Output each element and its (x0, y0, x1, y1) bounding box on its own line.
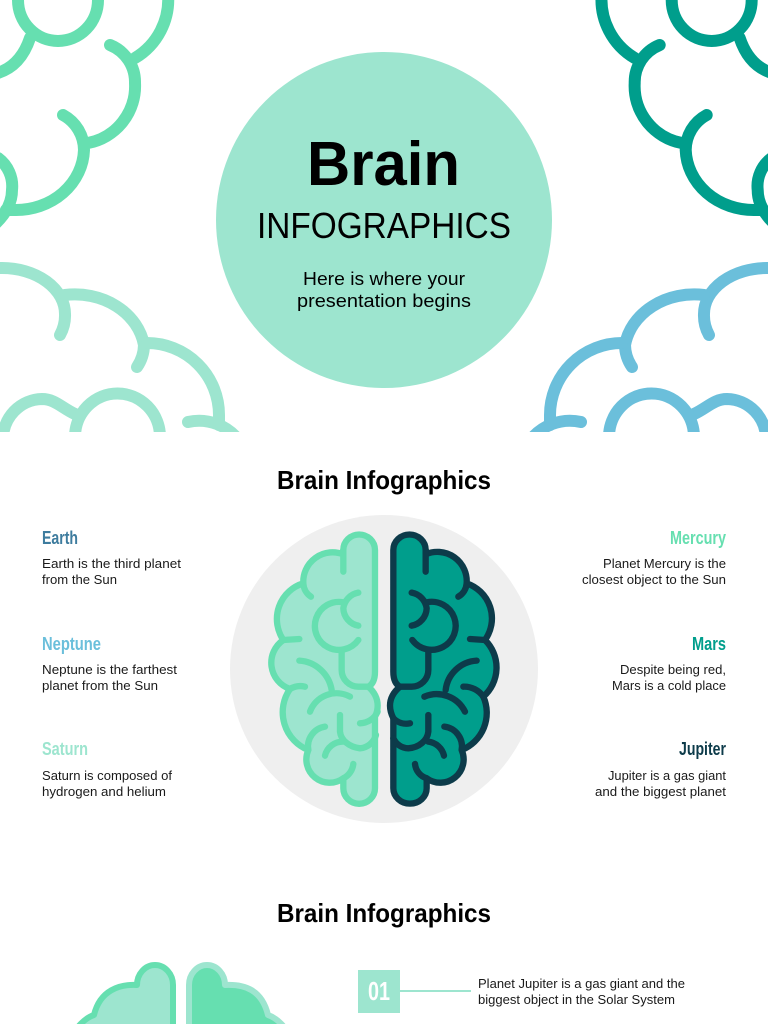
item: Mercury: closest object to the Sun (582, 572, 726, 587)
item: Mercury: Mercury (670, 528, 726, 548)
step 01 number box (358, 970, 400, 1013)
icon: bottom brain right half (189, 965, 292, 1024)
intro text: presentation begins (297, 291, 471, 311)
title circle (216, 52, 552, 388)
item: Neptune: planet from the Sun (42, 678, 158, 693)
item: Neptune: Neptune is the farthest (42, 662, 177, 677)
decoration: top-right teal brain outline (601, 0, 768, 225)
item: Earth: Earth is the third planet (42, 556, 181, 571)
step 01 text (478, 976, 685, 1007)
intro text: Here is where your (303, 269, 465, 289)
item: Saturn: Saturn (42, 739, 88, 759)
item: Mars: Despite being red, (620, 662, 726, 677)
item: Saturn: hydrogen and helium (42, 784, 166, 799)
item: Saturn (42, 739, 172, 799)
heading: section 1: Brain Infographics (277, 465, 491, 495)
item: Earth (42, 528, 181, 587)
icon: bottom brain left half (70, 965, 173, 1024)
decoration: top-left green brain outline (0, 0, 168, 225)
item: Earth: from the Sun (42, 572, 117, 587)
step 01 number box: 01 (368, 976, 390, 1006)
decoration: bottom-right blue brain outline (529, 268, 768, 442)
decoration: bottom-left mint brain outline (0, 268, 240, 442)
item: Jupiter: and the biggest planet (595, 784, 726, 799)
subtitle: INFOGRAPHICS (257, 205, 511, 246)
item: Mars: Mars is a cold place (612, 678, 726, 693)
title: Brain (307, 130, 460, 199)
item: Jupiter: Jupiter (679, 739, 726, 759)
icon: brain right half (390, 535, 497, 804)
item: Mars: Mars (692, 634, 726, 654)
item: Neptune (42, 634, 177, 693)
item: Mercury (582, 528, 726, 587)
item: Mars (612, 634, 726, 693)
step 01 text: Planet Jupiter is a gas giant and the (478, 976, 685, 991)
step 01 text: biggest object in the Solar System (478, 992, 675, 1007)
item: Jupiter (595, 739, 726, 799)
item: Jupiter: Jupiter is a gas giant (608, 768, 726, 783)
intro text (297, 269, 471, 311)
item: Earth: Earth (42, 528, 78, 548)
item: Mercury: Planet Mercury is the (603, 556, 726, 571)
item: Neptune: Neptune (42, 634, 101, 654)
heading: section 2: Brain Infographics (277, 898, 491, 928)
item: Saturn: Saturn is composed of (42, 768, 172, 783)
step 01 connector line (400, 990, 471, 992)
brain backdrop circle (230, 515, 538, 823)
icon: brain left half (271, 535, 378, 804)
